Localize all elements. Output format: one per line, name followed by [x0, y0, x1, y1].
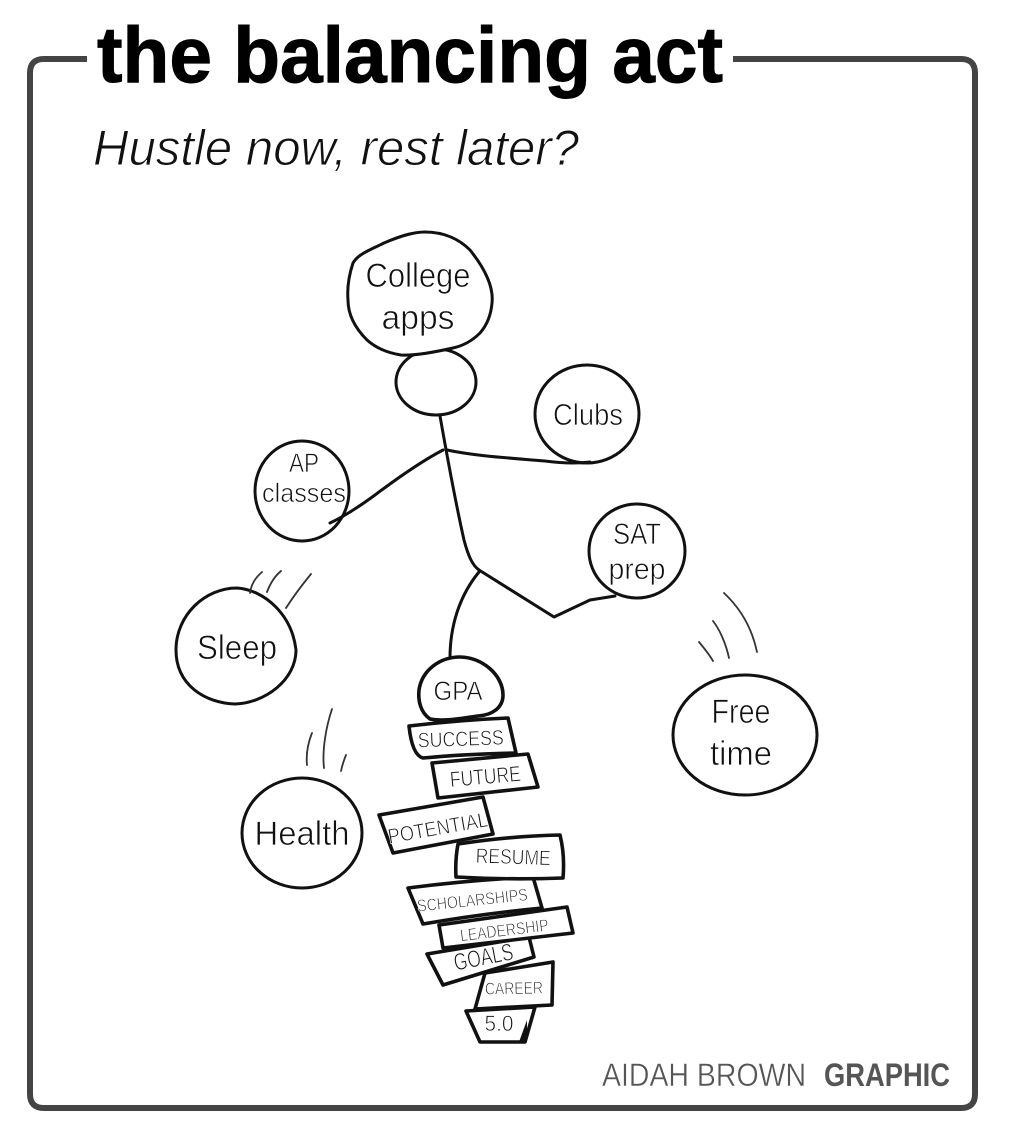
ball: clubs: Clubs [553, 397, 623, 432]
block: future: FUTURE [449, 761, 522, 792]
subtitle: Hustle now, rest later? [93, 120, 579, 176]
dropped ball: sleep: Sleep [197, 629, 277, 667]
block: career: CAREER [485, 978, 543, 999]
ball: college apps: College [366, 257, 470, 295]
ball: GPA: GPA [434, 676, 482, 706]
ball: college apps: apps [382, 299, 454, 337]
ball: college apps [348, 232, 492, 355]
ball: SAT prep: prep [608, 553, 666, 586]
block: goals [427, 937, 534, 985]
ball: GPA [419, 657, 503, 720]
teetering stack [379, 657, 573, 1042]
block: success [409, 718, 516, 758]
block: 5.0: 5.0 [484, 1011, 514, 1036]
dropped ball: free time: Free [712, 693, 770, 731]
block: 5.0 [466, 1007, 535, 1042]
title: the balancing act [97, 10, 723, 99]
stick figure juggler [255, 232, 685, 658]
dropped ball: free time: time [710, 735, 772, 773]
credit: AIDAH BROWN [602, 1057, 806, 1093]
block: leadership: LEADERSHIP [459, 916, 550, 945]
ball: AP classes: classes [262, 478, 346, 508]
ball: AP classes: AP [289, 448, 319, 478]
block: resume: RESUME [475, 845, 551, 870]
block: leadership [439, 907, 573, 948]
dropped ball: health [242, 709, 362, 888]
dropped ball: free time [673, 593, 817, 795]
block: career [475, 962, 553, 1009]
block: scholarships: SCHOLARSHIPS [416, 885, 529, 916]
ball: clubs [535, 365, 639, 463]
head [396, 349, 476, 415]
ball: SAT prep: SAT [613, 518, 661, 551]
figure body and limbs [330, 416, 615, 658]
block: future [432, 754, 538, 798]
credit [602, 1057, 950, 1093]
credit: GRAPHIC [824, 1057, 950, 1093]
ball: AP classes [255, 441, 349, 541]
block: goals: GOALS [452, 939, 516, 977]
block: potential: POTENTIAL [386, 809, 490, 849]
dropped ball: sleep [176, 571, 311, 704]
block: scholarships [408, 877, 542, 924]
ball: SAT prep [589, 504, 685, 598]
block: resume [456, 835, 564, 879]
dropped ball: health: Health [254, 815, 350, 853]
block: potential [379, 797, 493, 853]
block: success: SUCCESS [417, 727, 504, 752]
